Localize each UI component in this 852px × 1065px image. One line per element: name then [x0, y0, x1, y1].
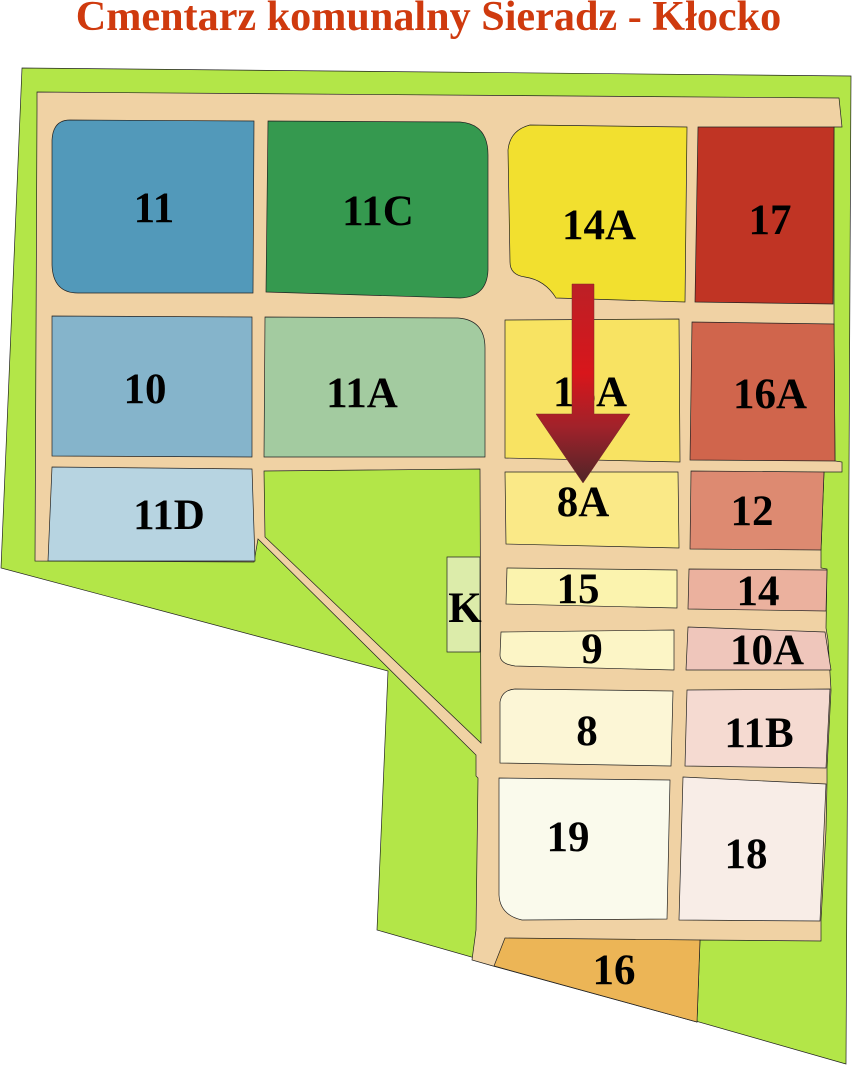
plot 11A [264, 317, 485, 457]
plot 15: 15 [556, 566, 600, 613]
plot 11 [52, 120, 254, 293]
plot 11C [266, 121, 488, 298]
plot 19: 19 [546, 814, 590, 861]
plot K [447, 557, 482, 652]
plot 12: 12 [730, 488, 774, 535]
plot 10 [52, 316, 252, 457]
plot 11D: 11D [133, 492, 205, 539]
plot 16A [690, 322, 835, 461]
plot 11A: 11A [326, 370, 398, 417]
plot 13A: 13A [553, 369, 627, 416]
plot 8: 8 [576, 708, 598, 755]
plot K: K [448, 585, 482, 632]
plot 9: 9 [581, 626, 603, 673]
plot 18 [679, 777, 826, 921]
plot 10: 10 [124, 366, 166, 413]
plot 10A: 10A [730, 627, 804, 674]
plot 13A [505, 319, 680, 462]
plot 8A [505, 472, 679, 548]
green area by chapel [264, 469, 481, 743]
plot 14 [688, 568, 827, 615]
plot 18: 18 [724, 831, 768, 878]
plot 14A [508, 125, 687, 302]
plot 11B [685, 689, 830, 768]
plot 16A: 16A [733, 371, 807, 418]
plot 17: 17 [748, 197, 792, 244]
plot 11D [48, 467, 255, 561]
plot 19 [499, 778, 670, 920]
plot 8A: 8A [557, 479, 609, 526]
plot 8 [500, 689, 673, 766]
arrow pointing to plots 13A and 8A [536, 284, 630, 483]
plot 16 [494, 938, 700, 1022]
plot 9 [500, 626, 674, 673]
plot 12 [690, 471, 824, 550]
plot 11C: 11C [342, 188, 414, 235]
plot 17 [695, 127, 834, 304]
plot 14: 14 [736, 568, 780, 615]
plot 11: 11 [134, 185, 174, 232]
plot 16: 16 [592, 947, 636, 994]
plot 10A [686, 627, 831, 674]
plot 15 [506, 566, 677, 613]
plot 11B: 11B [724, 710, 794, 757]
plot 14A: 14A [562, 202, 636, 249]
